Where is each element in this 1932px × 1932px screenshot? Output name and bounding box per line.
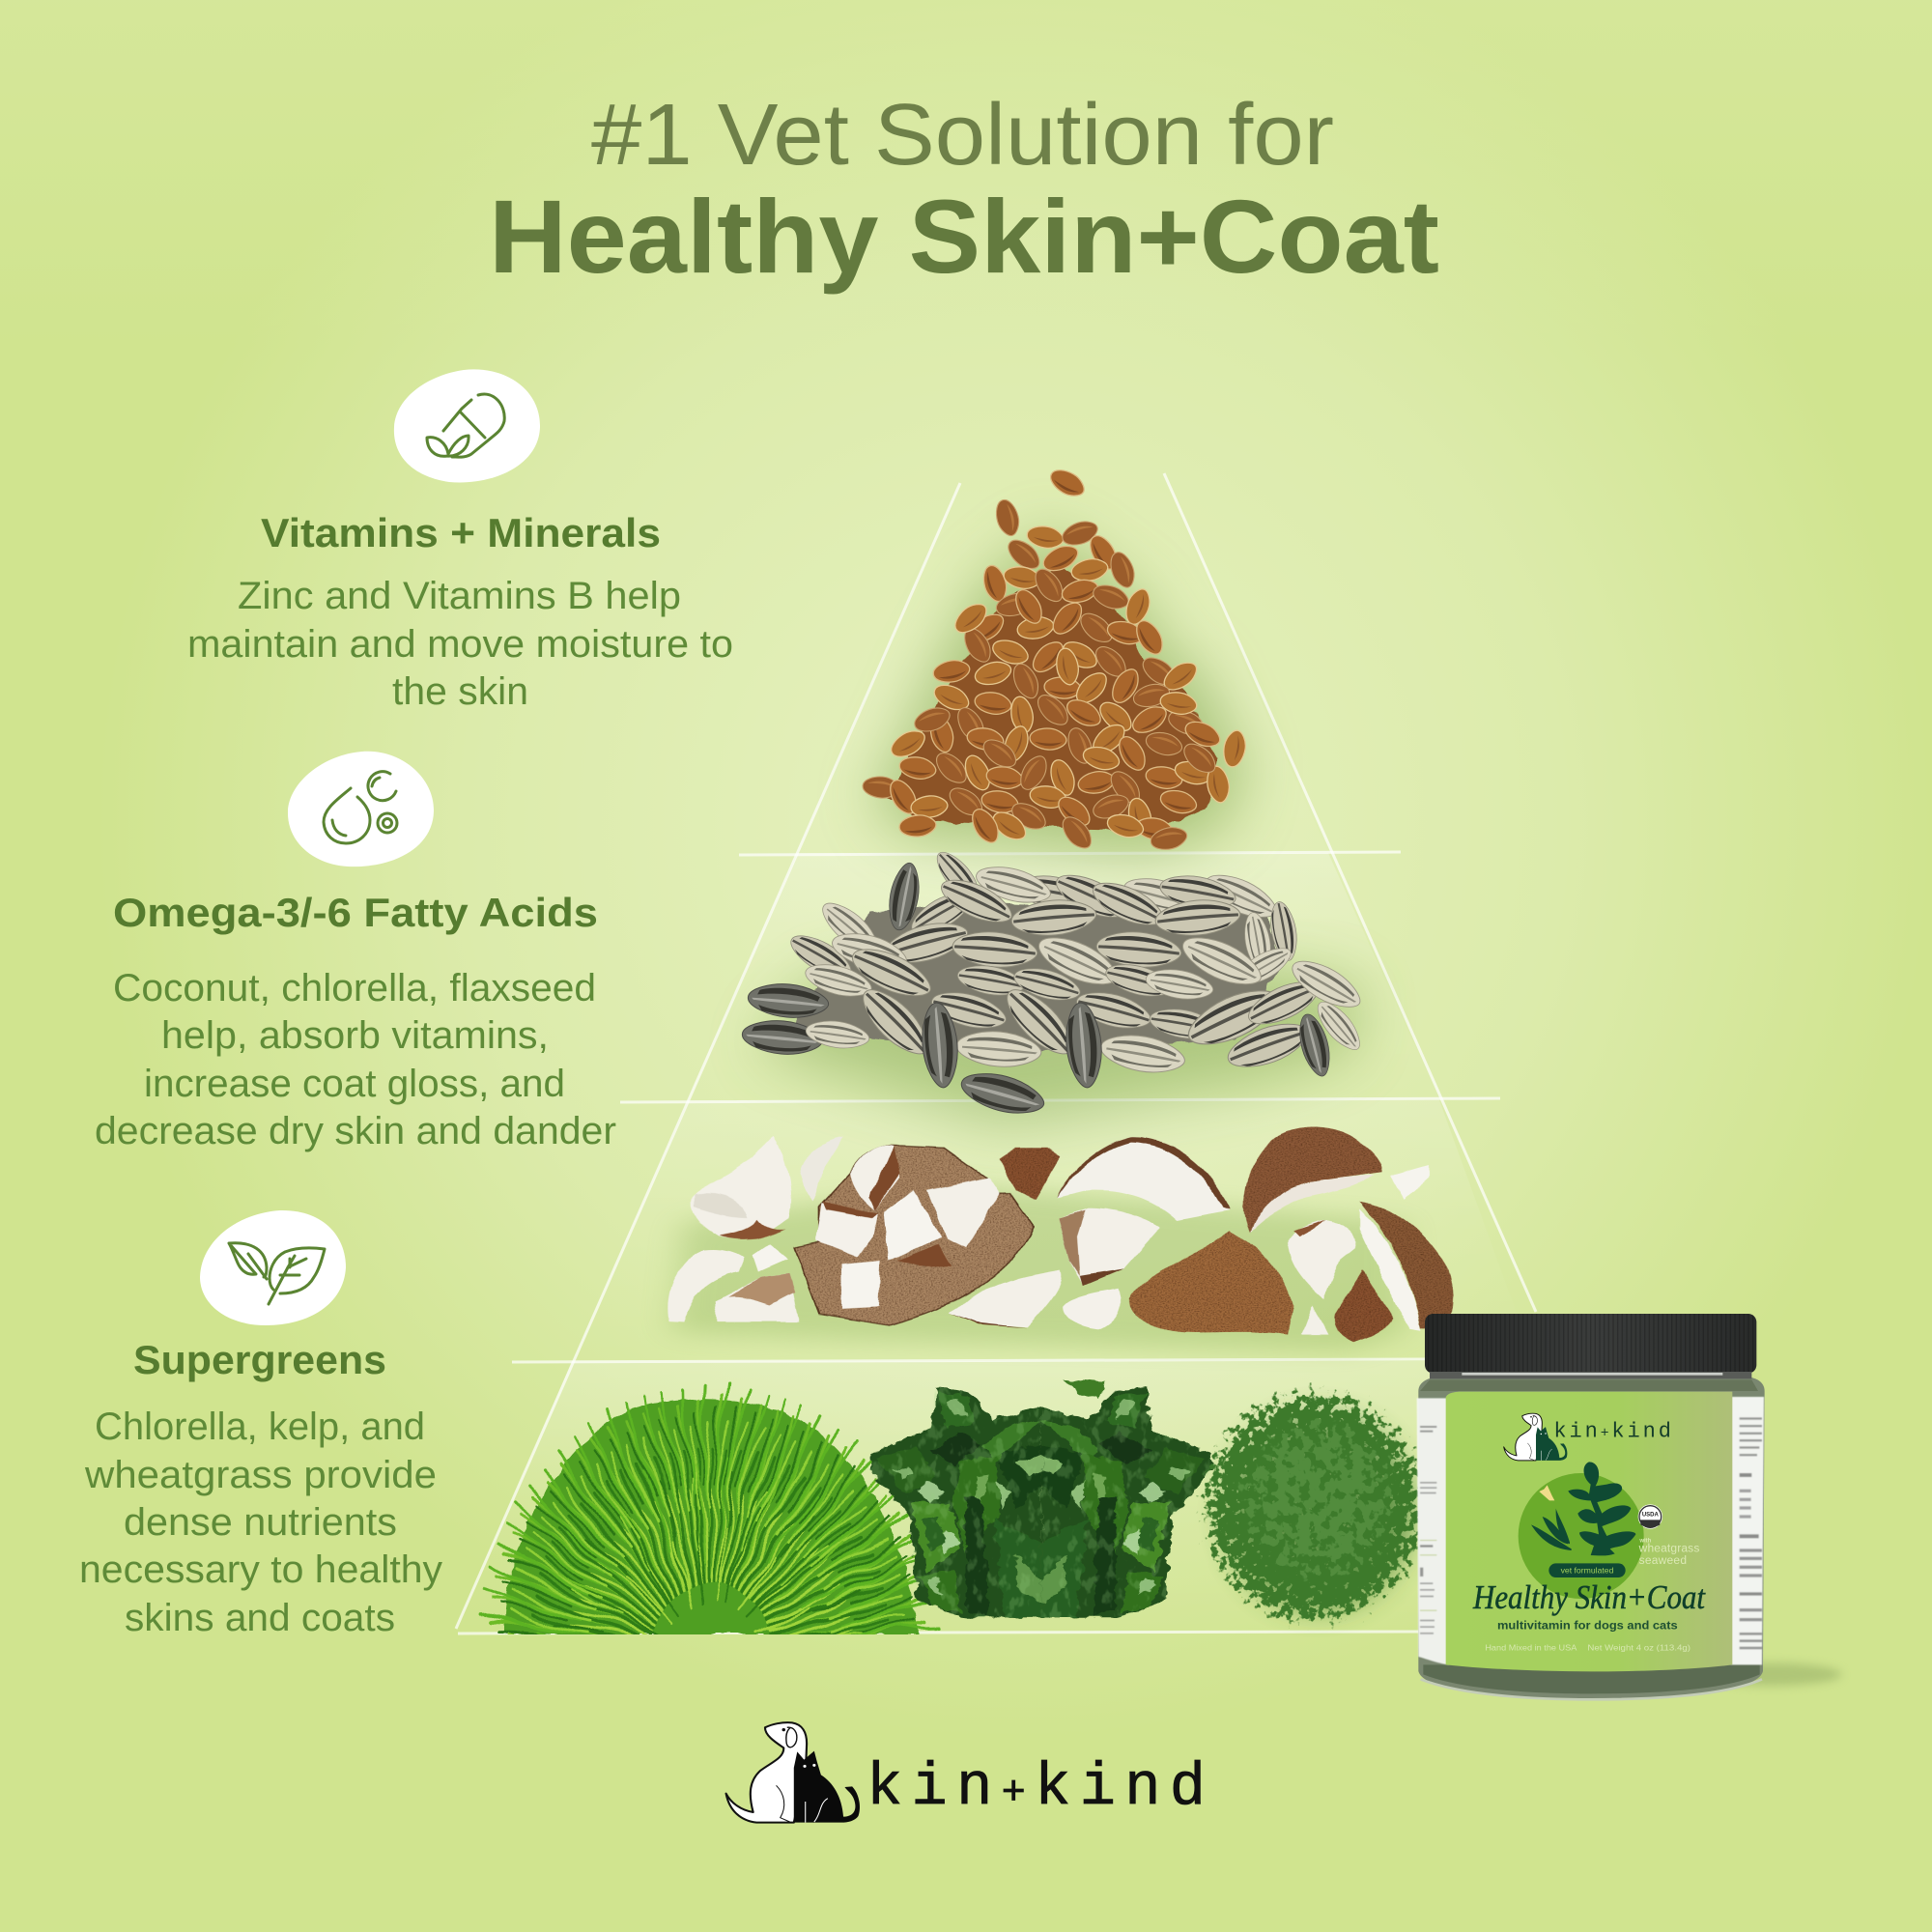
food: sunflower seed pile — [741, 845, 1367, 1125]
side panel right — [1731, 1397, 1764, 1664]
net weight line: Hand Mixed in the USA — [1485, 1642, 1577, 1652]
jar body — [1418, 1377, 1765, 1698]
icon: two leaves — [200, 1210, 346, 1325]
heading block: vitamins and minerals — [187, 369, 733, 713]
product name: Healthy Skin+Coat — [1472, 1579, 1706, 1616]
title: #1 Vet Solution for — [591, 87, 1334, 184]
with wheatgrass seaweed: with — [1638, 1539, 1652, 1545]
jar label — [1446, 1392, 1732, 1671]
heading block: vitamins and minerals: maintain and move moisture to — [187, 623, 733, 666]
food: green powder — [1206, 1393, 1422, 1621]
brand logo — [726, 1722, 1206, 1823]
heading block: vitamins and minerals: Vitamins + Minerals — [261, 510, 661, 555]
vet formulated badge — [1548, 1563, 1626, 1577]
heading block: vitamins and minerals: Zinc and Vitamins B help — [238, 575, 681, 617]
heading block: supergreens: Chlorella, kelp, and — [95, 1406, 425, 1448]
heading block: omega fatty acids: Omega-3/-6 Fatty Acids — [113, 890, 598, 935]
net weight line — [1485, 1642, 1690, 1652]
food: wheatgrass — [477, 1385, 943, 1661]
icon: capsule with leaves — [394, 369, 540, 482]
food: seaweed — [869, 1378, 1213, 1617]
title — [489, 87, 1439, 295]
with wheatgrass seaweed: seaweed — [1639, 1553, 1687, 1567]
food: coconut pieces — [668, 1126, 1454, 1351]
heading block: supergreens: dense nutrients — [124, 1501, 397, 1544]
brand logo: kin+kind — [867, 1753, 1206, 1822]
USDA organic seal: USDA — [1642, 1512, 1659, 1518]
heading block: omega fatty acids — [95, 752, 616, 1152]
heading block: supergreens — [79, 1210, 442, 1639]
food: flaxseed pile — [862, 465, 1248, 855]
jar shadow — [1700, 1662, 1842, 1686]
pyramid outline — [456, 473, 1584, 1634]
with wheatgrass seaweed: wheatgrass — [1638, 1542, 1699, 1555]
heading block: supergreens: skins and coats — [125, 1597, 395, 1639]
heading block: supergreens: wheatgrass provide — [84, 1454, 437, 1496]
net weight line: Net Weight 4 oz (113.4g) — [1587, 1642, 1690, 1652]
heading block: omega fatty acids: help, absorb vitamins, — [161, 1014, 549, 1057]
jar lid — [1425, 1314, 1756, 1378]
icon: oil drop and bubbles — [288, 752, 434, 867]
with wheatgrass seaweed — [1638, 1539, 1699, 1567]
icon: dog and cat — [726, 1722, 860, 1823]
label brand logo: kin+kind — [1553, 1419, 1671, 1443]
heading block: supergreens: Supergreens — [133, 1337, 386, 1382]
vet formulated badge: vet formulated — [1561, 1566, 1614, 1576]
title: Healthy Skin+Coat — [489, 178, 1439, 295]
heading block: omega fatty acids: decrease dry skin and dander — [95, 1110, 616, 1152]
heading block: supergreens: necessary to healthy — [79, 1548, 442, 1591]
USDA organic seal — [1638, 1504, 1662, 1529]
label seaweed artwork — [1519, 1462, 1644, 1599]
heading block: vitamins and minerals: the skin — [392, 670, 528, 713]
product subtitle: multivitamin for dogs and cats — [1497, 1620, 1678, 1633]
label brand logo — [1504, 1413, 1671, 1461]
product jar — [1417, 1314, 1842, 1699]
heading block: omega fatty acids: Coconut, chlorella, flaxseed — [113, 967, 596, 1009]
heading block: omega fatty acids: increase coat gloss, and — [144, 1063, 565, 1105]
side panel left — [1417, 1398, 1449, 1664]
